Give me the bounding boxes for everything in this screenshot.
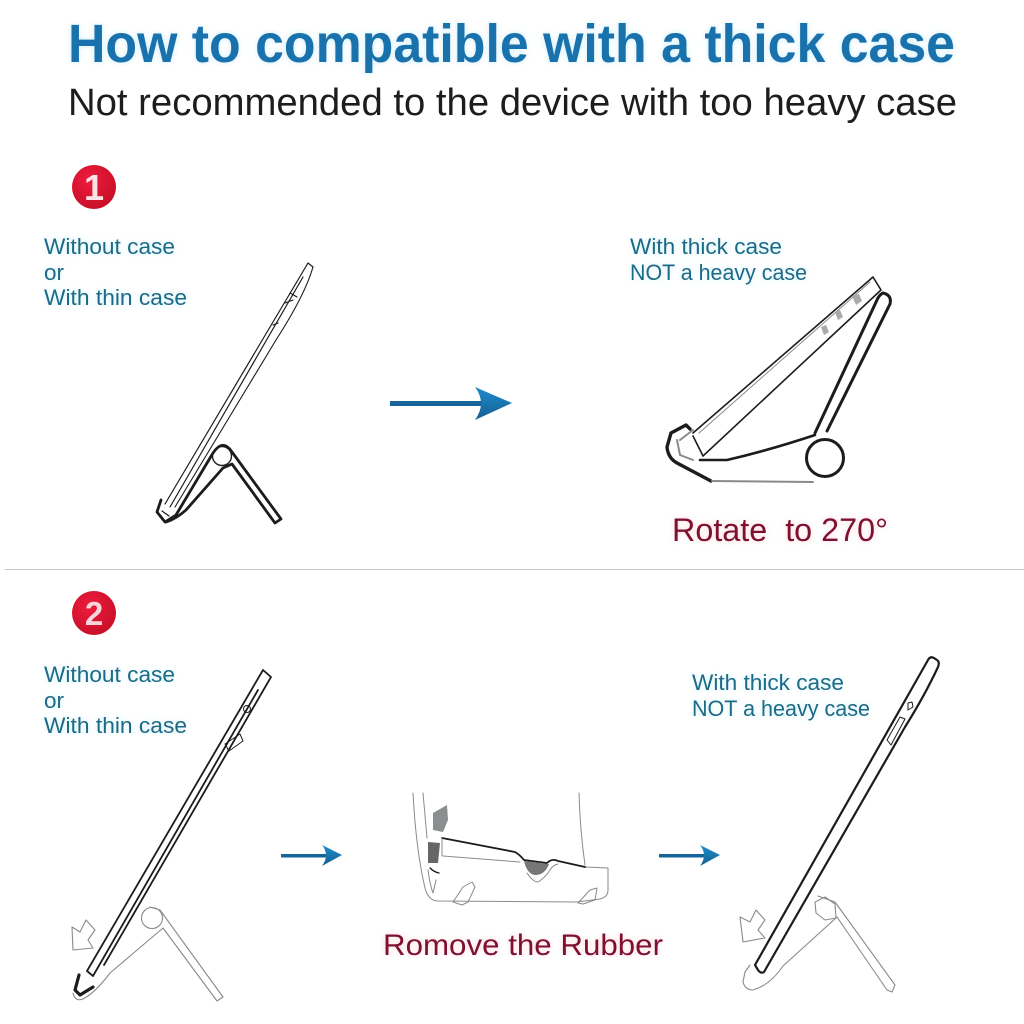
- step 1 badge: [72, 165, 116, 209]
- caption: remove the rubber: Romove the Rubber: [383, 929, 663, 962]
- label: without case or thin case (step 2): With thin case: [44, 713, 187, 738]
- arrow: to remove rubber: [281, 845, 342, 866]
- step 2 badge: 2: [85, 595, 103, 632]
- caption: rotate to 270: Rotate to 270°: [672, 512, 888, 548]
- illustration: tablet with stand and pointer arrow: [72, 670, 271, 1001]
- label: thick case (step 1): With thick case: [630, 234, 782, 259]
- label: thick case (step 2): NOT a heavy case: [692, 696, 870, 721]
- label: without case or thin case (step 2): Without case: [44, 662, 175, 687]
- label: thick case (step 1): NOT a heavy case: [630, 260, 807, 285]
- label: without case or thin case (step 1): Without case: [44, 234, 175, 259]
- arrow: to final position: [659, 845, 720, 866]
- title: How to compatible with a thick case: [68, 14, 955, 74]
- label: thick case (step 2): [692, 670, 870, 721]
- subtitle: Not recommended to the device with too heavy case: [68, 82, 957, 124]
- label: without case or thin case (step 2): [44, 662, 187, 738]
- illustration: tablet with thick case on stand: [740, 657, 939, 992]
- label: without case or thin case (step 1): With thin case: [44, 285, 187, 310]
- label: without case or thin case (step 1): or: [44, 260, 65, 285]
- step 2 badge: [72, 591, 116, 635]
- label: thick case (step 2): With thick case: [692, 670, 844, 695]
- label: without case or thin case (step 2): or: [44, 688, 65, 713]
- illustration: stand rotated 270 degrees, thick case: [667, 277, 890, 482]
- step 1 badge: 1: [84, 167, 104, 208]
- illustration: tablet on stand, thin case: [157, 263, 313, 523]
- divider: [5, 569, 1024, 570]
- arrow: step 1: [390, 387, 512, 420]
- illustration: removing the rubber foot: [413, 793, 608, 905]
- label: without case or thin case (step 1): [44, 234, 187, 310]
- label: thick case (step 1): [630, 234, 807, 285]
